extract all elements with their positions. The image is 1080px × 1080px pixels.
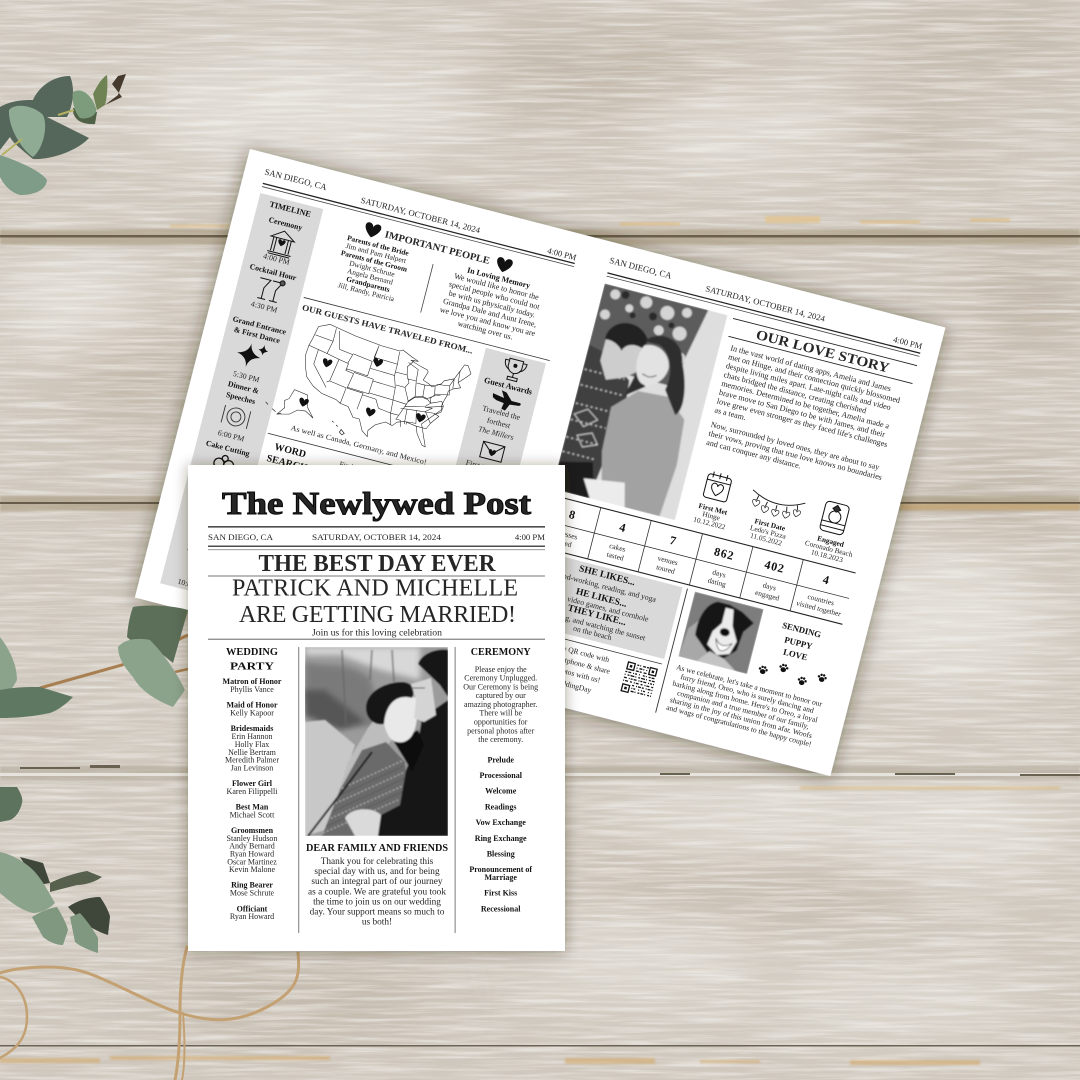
QR code	[620, 661, 658, 699]
love story text	[705, 343, 905, 491]
front: wedding party column: Flower Girl	[232, 779, 273, 788]
front: ceremony column	[463, 646, 538, 913]
front: wedding party column: Best Man	[236, 802, 269, 812]
man's hair	[604, 322, 648, 351]
front: wedding party column: WEDDING	[226, 646, 278, 658]
engaged label: Coronado Beach	[804, 538, 854, 559]
front: ceremony column: Welcome	[485, 787, 517, 796]
icon: heart garland	[748, 490, 805, 523]
panel: guest awards: First to RSVP	[465, 458, 510, 477]
parents list: Jim and Pam Halpert	[345, 241, 408, 265]
love story text: In the vast world of dating apps, Amelia and James	[730, 343, 892, 393]
love story text: love grew even stronger as they faced life's challenges	[716, 397, 888, 449]
US map	[262, 314, 474, 462]
front: wedding party column: Mose Schrute	[230, 888, 275, 898]
parents list: Parents of the Groom	[340, 248, 409, 274]
stats table: 8	[568, 507, 577, 522]
front: ceremony column: personal photos after	[467, 726, 535, 735]
stats table: 4	[821, 572, 831, 587]
love story text: as a team.	[714, 405, 747, 422]
engaged label: Engaged	[816, 533, 845, 549]
panel: guest awards: Guest Awards	[483, 376, 534, 397]
heading: sending puppy love	[775, 620, 822, 664]
puppy text: sharing in the joy of this union from afar. Woofs	[669, 695, 813, 740]
twine string	[0, 947, 299, 1080]
panel: timeline: 4:30 PM	[250, 299, 278, 315]
alaska and hawaii	[277, 387, 319, 423]
heading: sending puppy love: LOVE	[782, 647, 809, 662]
panel: timeline: Speeches	[225, 390, 256, 406]
in loving memory: special people who could not	[448, 279, 541, 312]
front: ceremony column: amazing photographer.	[464, 700, 537, 709]
panel: timeline: 5:30 PM	[232, 369, 261, 384]
right page header: SATURDAY, OCTOBER 14, 2024	[704, 283, 827, 324]
map note: As well as Canada, Germany, and Mexico!	[290, 423, 428, 467]
panel: timeline: Dinner &	[227, 379, 260, 396]
panel: timeline: Ceremony	[268, 215, 303, 232]
stats table: tried	[557, 537, 573, 549]
in loving memory: Grandpa Dale and Aunt Irene,	[442, 296, 538, 329]
heading: our love story	[728, 318, 917, 384]
man's face	[411, 678, 436, 722]
first date label: First Date	[754, 516, 787, 533]
front: ceremony column: Processional	[479, 771, 523, 780]
panel: likes: Dancing, and watching the sunset	[542, 608, 647, 643]
in loving memory: be with us physically today.	[448, 289, 536, 319]
front: ceremony column: There will be	[479, 709, 522, 718]
front: ceremony column: opportunities for	[474, 717, 528, 726]
stats table: toured	[655, 562, 676, 576]
front: wedding party column: Ring Bearer	[231, 881, 273, 890]
first met label: Hinge	[702, 509, 721, 522]
stats table: dresses	[556, 527, 579, 542]
stats table: countries	[807, 592, 835, 607]
heading: sending puppy love: SENDING	[781, 620, 822, 640]
panel: timeline: Grand Entrance	[232, 314, 288, 337]
in loving memory	[437, 261, 548, 347]
front: ceremony column: Readings	[485, 802, 516, 812]
puppy text: As we celebrate, let's take a moment to honor our	[675, 662, 824, 709]
stats table: venues	[657, 553, 679, 567]
front: ceremony column: First Kiss	[484, 888, 517, 898]
back sheet: shadow	[135, 149, 945, 776]
front: thank you text: the time to join us on our wedding	[313, 897, 441, 907]
panel: likes: SHE LIKES...	[578, 564, 636, 588]
love story text: Now, surrounded by loved ones, they are about to say	[710, 420, 881, 472]
first date label: 11.05.2022	[749, 531, 783, 548]
icon: cocktails	[255, 275, 286, 303]
front: wedding party column: Karen Filippelli	[227, 787, 278, 796]
in loving memory: we love you and know you are	[439, 305, 537, 338]
front: wedding party column: PARTY	[230, 660, 274, 672]
front: wedding party column: Kelly Kapoor	[230, 708, 274, 718]
front: ceremony column: CEREMONY	[471, 646, 531, 658]
front: ceremony column: Our Ceremony is being	[463, 682, 538, 691]
front: wedding party column: Holly Flax	[235, 740, 269, 749]
man's hat	[418, 650, 448, 697]
icon: plate	[221, 405, 251, 429]
puppy text: barking along from home. Here's to Oreo, a loyal	[672, 679, 819, 725]
engaged label	[802, 531, 856, 566]
front: thank you text: Thank you for celebrating this	[321, 856, 434, 867]
woman's face	[383, 695, 417, 742]
heading: our love story: OUR LOVE STORY	[754, 328, 891, 377]
front: wedding party column: Kevin Malone	[229, 865, 275, 874]
word search heading: Find the words	[338, 459, 384, 479]
front: ceremony column: Ring Exchange	[475, 834, 527, 843]
front: ceremony column: Vow Exchange	[476, 818, 526, 827]
front: names headline: ARE GETTING MARRIED!	[239, 602, 516, 628]
front: wedding party column: Ryan Howard	[230, 850, 274, 858]
icon: ring box	[819, 500, 850, 535]
hair	[342, 721, 392, 786]
front: couple photo	[305, 647, 448, 836]
front: wedding party column: Erin Hannon	[231, 732, 273, 741]
QR text: your smartphone & share	[534, 648, 612, 676]
stats table: dating	[707, 576, 727, 589]
engaged label: 10.18.2023	[810, 547, 844, 564]
first met label: First Met	[698, 501, 729, 517]
man's skin and neck	[599, 338, 642, 381]
icon: airplane	[489, 388, 523, 414]
left page header: SAN DIEGO, CA	[264, 167, 329, 192]
icon: calendar	[703, 470, 733, 502]
back sheet: inside spread	[159, 167, 925, 754]
front: wedding party column: Bridesmaids	[231, 724, 273, 733]
stats table	[537, 494, 856, 625]
stats table: 7	[668, 533, 678, 548]
front: ceremony column: Ceremony Unplugged.	[464, 674, 537, 683]
word search heading: SEARCH	[265, 453, 309, 474]
love story text: and can conquer any distance.	[705, 438, 802, 471]
heading: guests traveled: OUR GUESTS HAVE TRAVELED FROM...	[301, 303, 474, 356]
panel: likes: Golf, video games, and cornhole	[549, 590, 650, 624]
parents list: Dwight Schrute	[348, 258, 396, 279]
front: wedding party column: Matron of Honor	[223, 677, 282, 686]
parents list: Grandparents	[345, 274, 391, 294]
front: dateline: SATURDAY, OCTOBER 14, 2024	[312, 532, 442, 542]
icon: send-off circle	[187, 559, 207, 579]
front: wedding party column: Andy Bernard	[229, 842, 275, 851]
eucalyptus sprig lower left	[0, 606, 188, 953]
parents list: Jill, Randy, Patricia	[337, 280, 396, 304]
panel: likes: Wood-working, reading, and yoga	[552, 569, 658, 604]
stats table: tasted	[606, 550, 625, 563]
in loving memory: We would like to honor the	[453, 271, 540, 302]
front: wedding party column: Ryan Howard	[230, 912, 274, 921]
front: thank you text: day. Your support means so much to	[310, 907, 445, 917]
in loving memory: watching over us.	[457, 319, 514, 342]
icon: envelope	[480, 441, 505, 462]
woman's face	[636, 344, 670, 386]
panel: timeline	[160, 193, 323, 599]
word search heading	[265, 440, 385, 493]
scarf	[394, 730, 424, 772]
hand	[345, 809, 381, 836]
front: masthead: The Newlywed Post	[222, 485, 531, 521]
left page header	[261, 167, 579, 267]
panel: guest awards: The Millers	[477, 424, 515, 442]
front: ceremony column: captured by our	[476, 691, 526, 700]
first date label: Ledo's Pizza	[749, 523, 788, 541]
QR text	[528, 637, 614, 698]
heading: sending puppy love: PUPPY	[783, 635, 814, 651]
front: names headline	[232, 576, 518, 628]
stats table: visited together	[795, 598, 842, 619]
front: wedding party column	[223, 646, 282, 921]
panel: guest awards	[409, 348, 546, 663]
front: dear family heading: DEAR FAMILY AND FRIENDS	[306, 843, 448, 854]
panel: timeline: 6:00 PM	[217, 428, 245, 444]
love story text: despite living miles apart. Late-night calls and video	[725, 361, 892, 412]
QR text: #MWeddingDay	[541, 673, 593, 695]
puppy text: companion and a true member of our family,	[676, 688, 810, 731]
front: wedding party column: Phyllis Vance	[230, 685, 274, 694]
front: ceremony column: the ceremony.	[478, 735, 523, 744]
panel: likes: THEY LIKE...	[567, 604, 627, 628]
front: ceremony column: Pronouncement of	[469, 865, 532, 874]
love story text: brave move to San Diego to be with James, and their	[718, 388, 886, 439]
woman's coat	[322, 742, 407, 836]
front: dateline	[208, 526, 545, 550]
stats table: 862	[713, 544, 736, 563]
front: ceremony column: Recessional	[481, 904, 521, 913]
stats table: days	[762, 580, 777, 593]
panel: timeline: TIMELINE	[269, 200, 312, 219]
front: ceremony column: Blessing	[487, 850, 515, 858]
front: thank you text: as a couple. We are grateful you took	[308, 886, 446, 897]
front: invitation line: Join us for this loving celebration	[312, 628, 442, 638]
stats table: days	[711, 567, 727, 580]
panel: guest awards: forthest	[486, 416, 512, 430]
front: thank you text	[308, 856, 446, 927]
front: thank you text: us both!	[362, 917, 392, 927]
photo: dog	[678, 592, 764, 674]
front: ceremony column: Prelude	[487, 756, 514, 764]
front: wedding party column: Maid of Honor	[226, 700, 278, 710]
first date label	[747, 516, 790, 548]
panel: timeline: 10:00 PM	[177, 577, 209, 593]
front: wedding party column: Meredith Palmer	[225, 756, 279, 764]
panel: likes: HE LIKES...	[575, 587, 628, 610]
right page header	[606, 255, 925, 357]
right page header: SAN DIEGO, CA	[608, 255, 673, 281]
panel: guest awards: Traveled the	[481, 404, 522, 422]
stats table: 402	[763, 557, 786, 576]
right page header: 4:00 PM	[892, 334, 924, 351]
panel: timeline: Farewell	[186, 543, 217, 559]
love story text: memories. Determined to be together, Amelia made a	[720, 379, 891, 431]
love story text: met on Hinge, and their connection quickly blossomed	[727, 352, 901, 405]
panel: likes: on the beach	[572, 624, 613, 642]
front: headline: THE BEST DAY EVER	[258, 551, 496, 577]
map hearts	[298, 342, 437, 437]
stats table: engaged	[754, 588, 781, 603]
panel: timeline: 4:00 PM	[262, 251, 291, 267]
puppy text	[665, 662, 824, 749]
front: wedding party column: Nellie Bertram	[228, 748, 277, 757]
panel: timeline: Cake Cutting	[205, 438, 251, 458]
panel: timeline: Cocktail Hour	[249, 262, 298, 283]
QR text: Scan the QR code with	[540, 638, 611, 664]
front: wedding party column: Oscar Martinez	[227, 857, 277, 866]
front: thank you text: special day with us, and for being	[314, 866, 440, 877]
puppy text: and wags of congratulations to the happy couple!	[665, 703, 812, 749]
panel: likes	[518, 550, 683, 659]
love story text: their vows, proving that true love knows no boundaries	[708, 429, 883, 482]
front: wedding party column: Jan Levinson	[231, 763, 273, 772]
front: wedding party column: Groomsmen	[231, 826, 274, 835]
parents list	[332, 233, 413, 305]
icon: sparkle	[234, 339, 270, 371]
front: wedding party column: Michael Scott	[230, 810, 275, 819]
word search heading: WORD	[273, 442, 307, 460]
in loving memory: In Loving Memory	[466, 265, 531, 290]
front: wedding party column: Officiant	[237, 904, 268, 913]
plank seams	[0, 216, 1080, 1065]
icon: chapel	[267, 228, 296, 258]
parents list: Angela Bernard	[346, 266, 394, 287]
left page header: 4:00 PM	[546, 245, 578, 262]
woman's sweater	[600, 390, 685, 516]
heading: important people	[363, 222, 514, 274]
QR text: your photos with us!	[538, 660, 601, 685]
beret	[366, 682, 414, 724]
left page header: SATURDAY, OCTOBER 14, 2024	[360, 195, 482, 235]
icons: paw prints	[757, 658, 828, 691]
photo: couple	[552, 283, 728, 520]
man's coat	[375, 700, 448, 836]
front: wedding party column: Stanley Hudson	[227, 834, 277, 843]
icon: trophy	[501, 357, 528, 383]
front: ceremony column: Marriage	[484, 873, 517, 882]
front: dateline: 4:00 PM	[515, 532, 545, 542]
eucalyptus sprig top left	[0, 74, 126, 195]
front: dateline: SAN DIEGO, CA	[208, 532, 274, 542]
front: ceremony column: Please enjoy the	[475, 665, 527, 674]
front card	[188, 465, 565, 951]
stats table: 4	[618, 520, 627, 535]
heading: important people: IMPORTANT PEOPLE	[384, 229, 491, 267]
love story text: chats bridged the distance, creating cherished	[723, 370, 867, 415]
woman's hair	[626, 336, 686, 416]
puppy text: furry friend, Oreo, who is surely dancing and	[680, 672, 815, 715]
first met label	[692, 501, 730, 532]
icon: cake	[212, 453, 236, 474]
stats table: cakes	[608, 541, 627, 554]
front: names headline: PATRICK AND MICHELLE	[232, 576, 518, 602]
panel: timeline: & First Dance	[233, 325, 281, 345]
first met label: 10.12.2022	[692, 515, 727, 532]
front: thank you text: such an integral part of our journey	[311, 876, 443, 887]
parents list: Parents of the Bride	[346, 233, 411, 258]
